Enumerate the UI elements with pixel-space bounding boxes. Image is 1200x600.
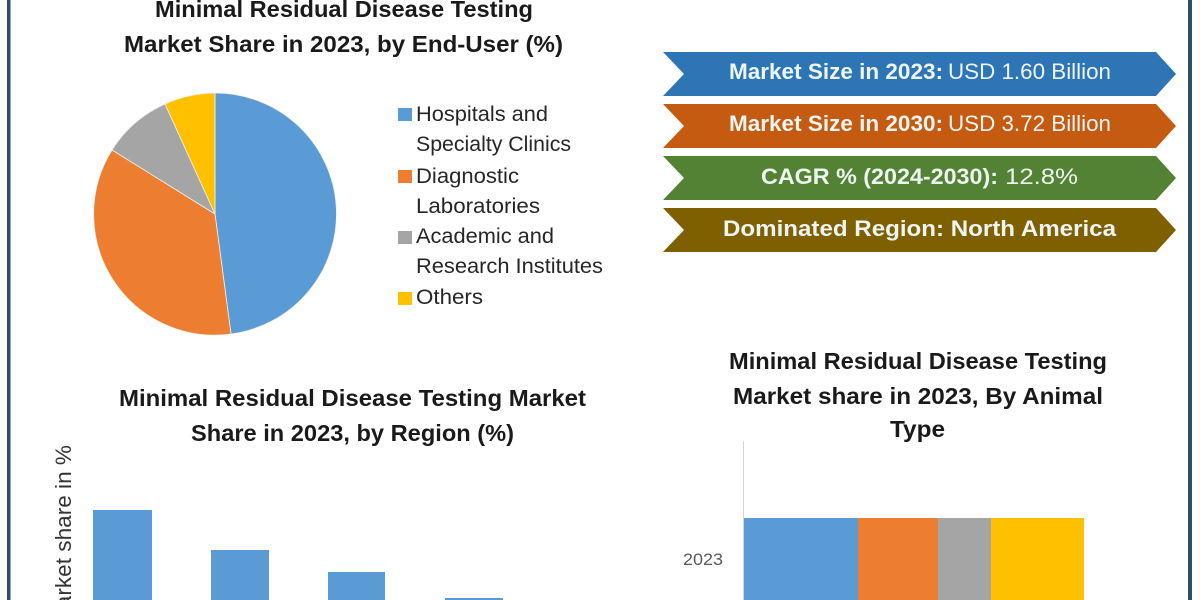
- title: bar chart by region: Minimal Residual Disease Testing Market: [119, 385, 586, 411]
- banner: market size 2023: USD 1.60 Billion: [948, 59, 1111, 84]
- banner: market size 2023: Market Size in 2023:: [729, 59, 943, 84]
- banner: market size 2023: [663, 52, 1176, 96]
- title: bar chart by region: Share in 2023, by Region (%): [191, 420, 514, 446]
- title: stacked bar by animal type: Market share in 2023, By Animal: [733, 383, 1103, 409]
- pie legend: Hospitals and: [416, 103, 548, 126]
- right page border: [1188, 0, 1192, 600]
- banner: market size 2030: USD 3.72 Billion: [948, 111, 1111, 136]
- bar chart: share by region: [93, 510, 503, 600]
- left page border: [7, 0, 10, 600]
- banner: CAGR: 12.8%: [1005, 164, 1078, 189]
- banner: CAGR: CAGR % (2024-2030):: [761, 164, 998, 189]
- title: stacked bar by animal type: [729, 348, 1107, 442]
- pie legend: Diagnostic: [416, 165, 519, 188]
- banner: market size 2030: [663, 104, 1176, 148]
- title: pie chart by end-user: Market Share in 2023, by End-User (%): [124, 31, 563, 57]
- banner: CAGR: [663, 156, 1176, 200]
- stacked bar chart axis: [742, 441, 744, 600]
- pie legend: [398, 103, 603, 309]
- banner: dominated region: Dominated Region: North America: [723, 216, 1117, 241]
- stacked bar: share by animal type: [744, 518, 1084, 600]
- pie legend: Others: [416, 286, 483, 309]
- pie legend: Specialty Clinics: [416, 133, 571, 156]
- title: stacked bar by animal type: Minimal Residual Disease Testing: [729, 348, 1107, 374]
- year label 2023: 2023: [683, 550, 723, 569]
- pie legend: Laboratories: [416, 195, 540, 218]
- pie chart: share by end-user: [94, 93, 336, 335]
- pie legend: Research Institutes: [416, 255, 603, 278]
- title: pie chart by end-user: [124, 0, 563, 57]
- banner: dominated region: [663, 208, 1176, 252]
- title: stacked bar by animal type: Type: [890, 416, 945, 442]
- pie legend: Academic and: [416, 225, 554, 248]
- banner: market size 2030: Market Size in 2030:: [729, 111, 943, 136]
- title: bar chart by region: [119, 385, 586, 446]
